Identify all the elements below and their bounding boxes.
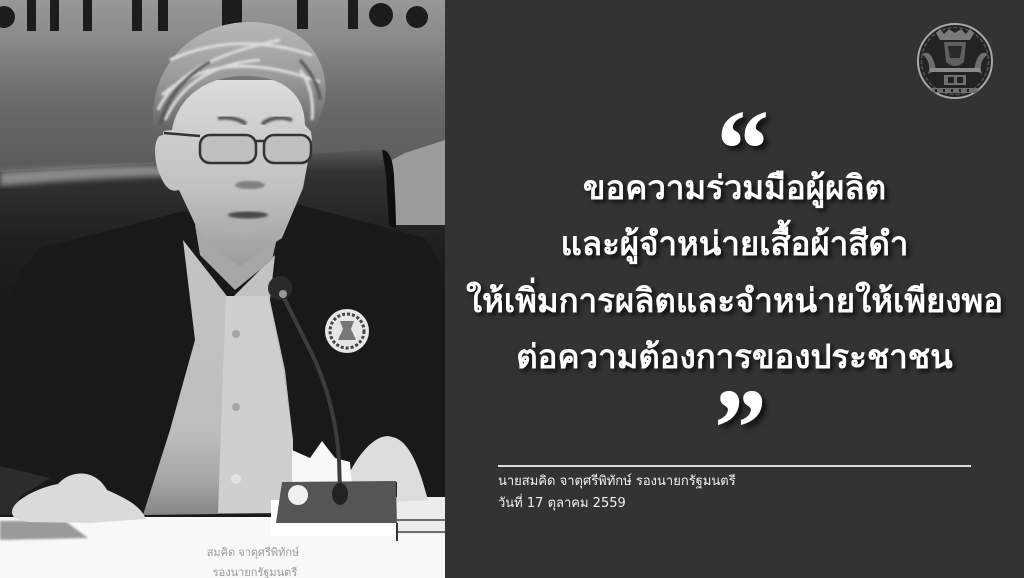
quote line 3: ให้เพิ่มการผลิตและจำหน่ายให้เพียงพอ <box>466 282 1003 319</box>
attribution divider <box>498 465 971 467</box>
quote line 4: ต่อความต้องการของประชาชน <box>516 338 953 375</box>
head <box>153 22 326 266</box>
panel: dark quote background <box>445 0 1024 578</box>
microphone base <box>271 481 398 541</box>
quote text <box>466 169 1006 375</box>
chair <box>0 149 445 340</box>
neck <box>195 225 280 290</box>
white paper <box>292 441 352 484</box>
jacket sleeve <box>0 466 50 515</box>
quote line 1: ขอความร่วมมือผู้ผลิต <box>583 169 886 206</box>
quote line 2: และผู้จำหน่ายเสื้อผ้าสีดำ <box>561 225 908 262</box>
wall background <box>0 0 445 300</box>
attribution date: วันที่ 17 ตุลาคม 2559 <box>498 496 626 511</box>
shirt <box>143 240 293 515</box>
right hand <box>350 436 428 502</box>
attribution name: นายสมคิด จาตุศรีพิทักษ์ รองนายกรัฐมนตรี <box>498 474 736 489</box>
left hand <box>12 473 146 523</box>
lapel badge <box>325 309 369 353</box>
table <box>0 497 445 578</box>
name plate text <box>207 546 300 578</box>
panel: photo of speaker <box>0 0 445 578</box>
microphone <box>268 276 348 505</box>
name plate text: สมคิด จาตุศรีพิทักษ์ <box>207 546 300 559</box>
background sign lettering <box>0 0 428 31</box>
icon: government seal <box>917 23 993 99</box>
opening quotation mark: “ <box>711 88 767 212</box>
jacket <box>0 205 445 578</box>
closing quotation mark: ” <box>708 367 764 491</box>
glasses <box>164 133 311 163</box>
